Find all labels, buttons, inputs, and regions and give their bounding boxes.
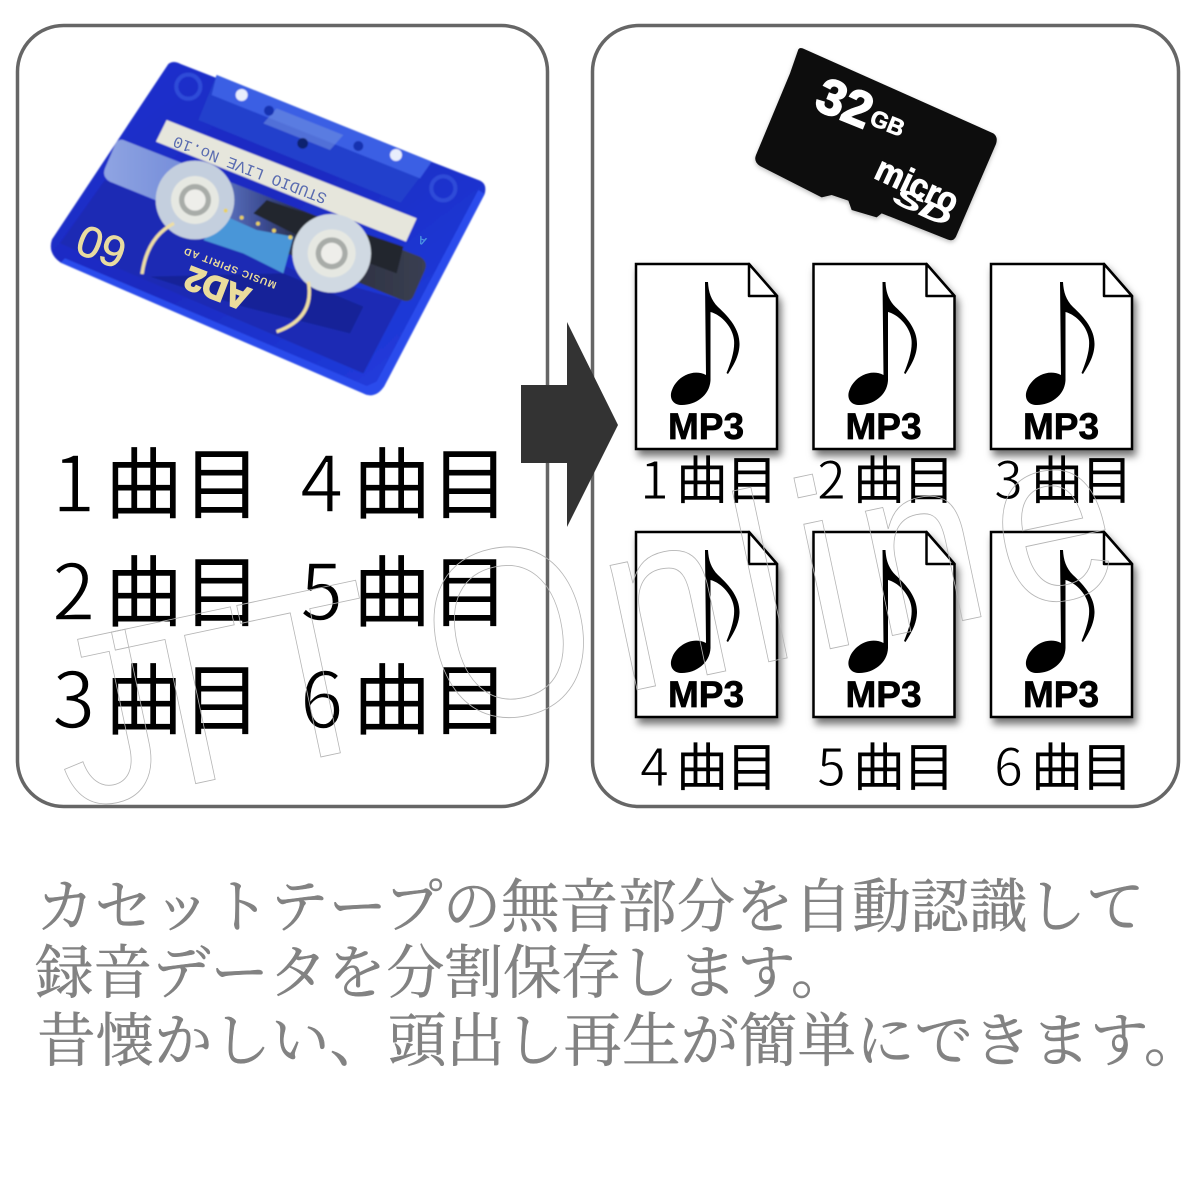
description line 3: 昔懐かしい、頭出し再生が簡単にできます。 — [37, 1009, 1200, 1074]
panel: cassette tape tracks — [18, 26, 548, 806]
panel: MP3 files on microSD — [592, 26, 1178, 806]
cassette label text: STUDIO LIVE No.10 — [171, 131, 330, 207]
MP3 file 6: MP3 — [1023, 674, 1099, 715]
card capacity: 32 — [809, 67, 881, 139]
cassette tagline: MUSIC SPIRIT AD — [182, 244, 278, 290]
MP3 file 6 — [991, 532, 1132, 717]
file 6 label: 6曲目 — [994, 726, 1133, 801]
description line 2: 録音データを分割保存します。 — [35, 941, 849, 1006]
MP3 file 3: MP3 — [1023, 406, 1099, 447]
MP3 file 4: MP3 — [668, 674, 744, 715]
text block: MP3 track labels — [640, 439, 1133, 801]
file 4 label: 4曲目 — [640, 726, 778, 801]
SD logo: SD — [889, 183, 955, 232]
track 1 label: 1曲目 — [52, 423, 261, 535]
card capacity unit: GB — [866, 105, 909, 142]
track 2 label: 2曲目 — [52, 531, 261, 643]
file 5 label: 5曲目 — [817, 726, 955, 801]
MP3 file 5 — [814, 532, 954, 717]
MP3 file 2 — [814, 264, 954, 449]
MP3 file 2: MP3 — [845, 406, 922, 447]
arrow: cassette to MP3 — [521, 322, 618, 527]
track 4 label: 4曲目 — [300, 423, 509, 535]
track 5 label: 5曲目 — [300, 531, 509, 643]
track 6 label: 6曲目 — [300, 639, 509, 751]
cassette length mark: 60 — [70, 214, 133, 278]
icon: blue cassette tape — [51, 62, 485, 395]
microSD logo: micro — [869, 150, 964, 221]
file 1 label: 1曲目 — [640, 439, 778, 514]
description line 1: カセットテープの無音部分を自動認識して — [36, 875, 1145, 940]
text block: description — [35, 875, 1200, 1074]
file 2 label: 2曲目 — [817, 439, 955, 514]
watermark: JTT Online — [25, 373, 1138, 861]
MP3 file 5: MP3 — [845, 674, 922, 715]
cassette brand: AD2 — [180, 258, 255, 317]
MP3 file 1 — [636, 264, 777, 449]
MP3 file 4 — [636, 532, 777, 717]
MP3 file 3 — [991, 264, 1132, 449]
MP3 file 1: MP3 — [668, 406, 744, 447]
text block: cassette track list — [52, 423, 509, 751]
icon: 32GB microSD card — [755, 48, 997, 240]
cassette side mark: A — [417, 233, 429, 247]
track 3 label: 3曲目 — [52, 639, 261, 751]
file 3 label: 3曲目 — [994, 439, 1133, 514]
